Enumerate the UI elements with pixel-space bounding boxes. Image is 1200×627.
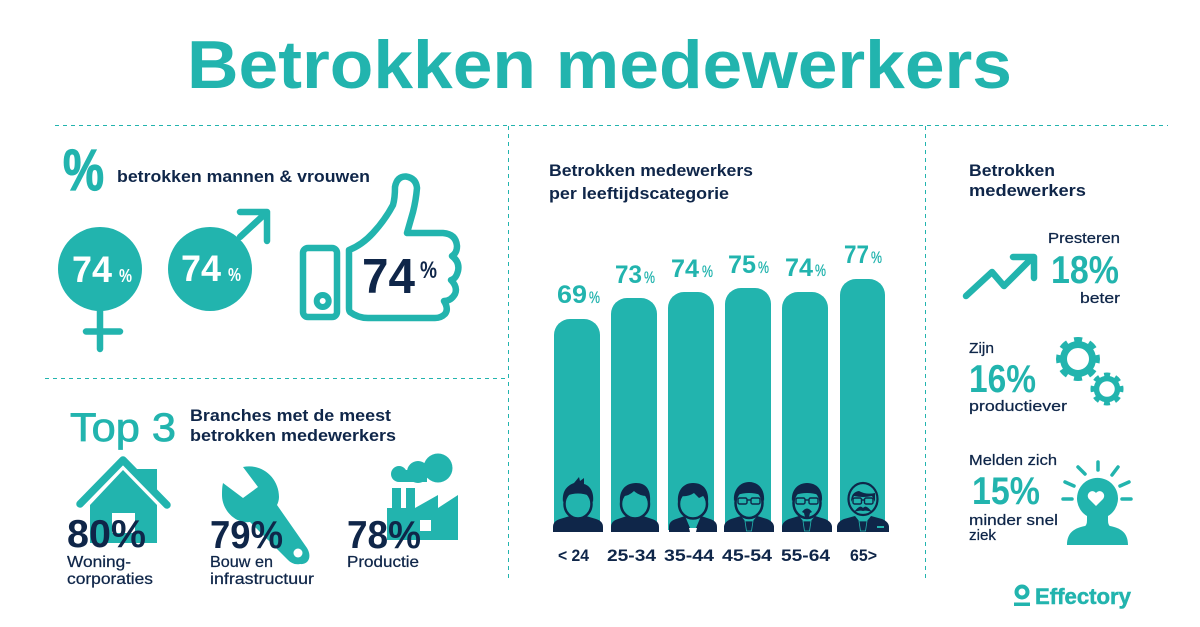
icon: house [80,460,167,543]
panel: leeftijdscategorie [549,161,889,565]
icon: avatar man with glasses [724,482,774,532]
heading: betrokken medewerkers: Betrokken [969,162,1055,180]
stat: woningcorporaties: corporaties [67,571,153,588]
icon: rising arrow [966,257,1034,296]
stat: presteren 18% beter [1048,230,1120,307]
icon: avatar man short hair [611,483,659,532]
bar: 55-64, 74%: % [815,261,826,280]
subheading: branches: betrokken medewerkers [190,426,396,445]
bar: onder 24, 69%: 69 [557,281,587,309]
stat: zijn 16% productiever: Zijn [969,340,994,357]
age labels: 45-54 [722,547,773,565]
age labels: 55-64 [781,547,831,565]
heading: top 3: Top 3 [70,406,176,450]
icon: person with heart [1063,462,1131,545]
stat: presteren 18% beter: beter [1080,290,1120,307]
stat: productie: Productie [347,554,419,571]
stat: melden zich 15% minder snel ziek: minder snel [969,512,1058,529]
bar: 65 plus, 77% [840,241,885,530]
title: Betrokken medewerkers [187,27,1012,103]
logo: Effectory: Effectory [1035,584,1132,609]
female symbol with 74% [58,227,142,349]
age labels: 65> [850,547,877,565]
bar: 65 plus, 77%: 77 [844,241,869,269]
stat: melden zich 15% minder snel ziek: Melden zich [969,452,1057,469]
stat: presteren 18% beter: Presteren [1048,230,1120,247]
stat: bouw en infrastructuur: infrastructuur [210,571,315,588]
stat: bouw en infrastructuur [210,514,315,588]
bar: 35-44, 74% [668,255,714,530]
bar: onder 24, 69%: % [589,288,600,307]
bar: 35-44, 74%: 74 [671,255,699,283]
age labels: < 24 [558,547,590,565]
bar: 45-54, 75%: 75 [728,251,756,279]
icon: thumbs up with 74% [303,176,458,318]
male symbol with 74%: 74 [181,248,221,289]
panel: betrokken mannen en vrouwen [58,138,458,349]
bar: 45-54, 75% [725,251,771,530]
stat: presteren 18% beter: 18% [1051,249,1119,292]
bar: 25-34, 73%: % [644,268,655,287]
bar: onder 24, 69% [554,281,600,530]
stat: woningcorporaties: 80% [67,513,146,556]
icon: wrench [222,466,309,564]
female symbol with 74%: 74 [72,249,112,290]
heading: leeftijdscategorie: Betrokken medewerkers [549,161,753,180]
age labels [558,547,877,565]
bar: 25-34, 73%: 73 [615,261,642,289]
bar: 25-34, 73% [611,261,657,530]
panel: top 3 branches [67,406,458,588]
subheading: branches: Branches met de meest [190,406,391,425]
icon: thumbs up with 74%: 74 [362,250,415,304]
stat: woningcorporaties [67,513,153,588]
heading: leeftijdscategorie: per leeftijdscategorie [549,184,729,203]
stat: melden zich 15% minder snel ziek [969,452,1058,544]
icon: avatar young man [553,477,603,532]
bar chart [554,241,885,530]
age labels: 35-44 [664,547,715,565]
icon: avatar older man with moustache [837,483,889,532]
heading: betrokken medewerkers: medewerkers [969,182,1086,200]
bar: 55-64, 74%: 74 [785,254,813,282]
bar: 35-44, 74%: % [702,262,713,281]
stat: bouw en infrastructuur: Bouw en [210,554,273,571]
stat: zijn 16% productiever: productiever [969,398,1067,415]
heading: mannen en vrouwen: betrokken mannen & vrouwen [117,167,370,186]
icon: percent sign: % [63,138,104,203]
stat: melden zich 15% minder snel ziek: ziek [969,527,996,544]
stat: melden zich 15% minder snel ziek: 15% [972,470,1040,513]
bar: 65 plus, 77%: % [871,248,882,267]
stat: zijn 16% productiever [969,340,1067,415]
icon: thumbs up with 74%: % [420,257,437,284]
stat: bouw en infrastructuur: 79% [210,514,283,557]
bar: 45-54, 75%: % [758,258,769,277]
stat: productie: 78% [347,514,421,557]
panel: betrokken medewerkers effecten [966,162,1131,545]
stat: woningcorporaties: Woning- [67,554,131,571]
icon: factory [387,454,458,540]
icon: avatar man with fringe [669,483,717,532]
stat: zijn 16% productiever: 16% [969,358,1036,401]
female symbol with 74%: % [119,266,132,286]
bar: 55-64, 74% [782,254,828,530]
icon: gears [1055,336,1124,406]
male symbol with 74%: % [228,265,241,285]
icon: avatar man with goatee [782,483,832,532]
male symbol with 74% [168,212,267,311]
age labels: 25-34 [607,547,657,565]
